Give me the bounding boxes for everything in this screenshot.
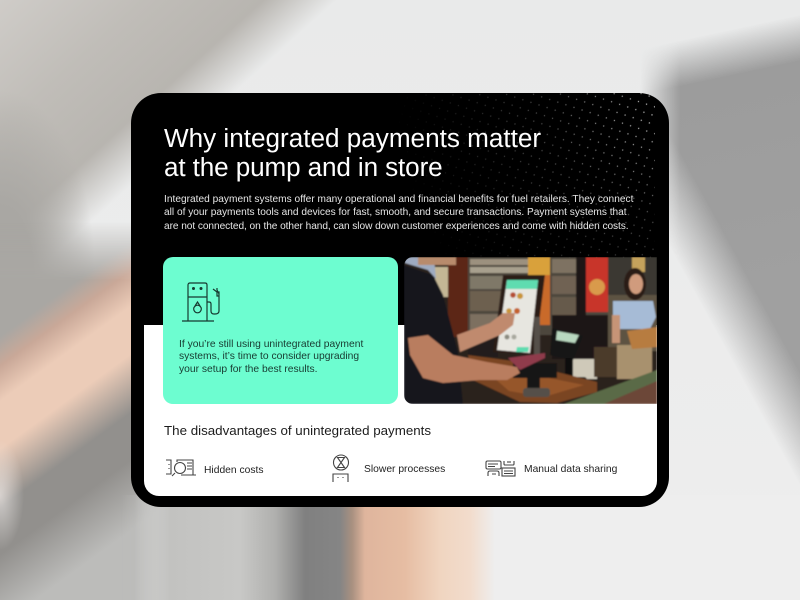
dotted halftone texture — [412, 93, 655, 258]
item: hidden costs — [166, 460, 264, 476]
panel: mint callout — [163, 257, 398, 404]
man — [404, 265, 463, 404]
label: Hidden costs — [204, 464, 264, 476]
white lower panel — [144, 325, 657, 496]
icon: hourglass and person — [332, 454, 350, 482]
icon: data sharing — [485, 460, 516, 477]
title: at the pump and in store — [164, 152, 443, 182]
title: Why integrated payments matter — [164, 123, 541, 153]
kiosk screen — [493, 275, 545, 355]
stone wall — [468, 257, 608, 335]
card terminal — [550, 328, 583, 360]
photo: customer at self-checkout kiosk — [404, 257, 657, 404]
title — [164, 123, 541, 182]
callout text: systems, it’s time to consider upgrading — [179, 351, 359, 362]
callout text: If you’re still using unintegrated payment — [179, 338, 363, 350]
icon: fuel pump — [182, 282, 220, 322]
callout text — [179, 338, 364, 375]
icon: hidden costs — [166, 460, 196, 476]
display case — [564, 370, 657, 404]
intro paragraph — [164, 194, 634, 232]
item: slower processes — [332, 454, 445, 482]
intro paragraph: all of your payments tools and devices for fast, smooth, and secure transactions. Payment systems that — [164, 207, 627, 218]
woman — [624, 268, 646, 300]
counter — [468, 355, 597, 403]
subheading: The disadvantages of unintegrated payments — [164, 423, 431, 438]
intro paragraph: Integrated payment systems offer many operational and financial benefits for fuel retailers. They connect — [164, 194, 633, 205]
label: Slower processes — [364, 464, 445, 474]
item: manual data sharing — [485, 460, 617, 477]
main card — [131, 93, 669, 507]
callout text: your setup for the best results. — [179, 364, 318, 375]
intro paragraph: are not connected, on the other hand, can slow down customer experiences and come with hidden costs. — [164, 221, 629, 232]
label: Manual data sharing — [524, 464, 617, 474]
